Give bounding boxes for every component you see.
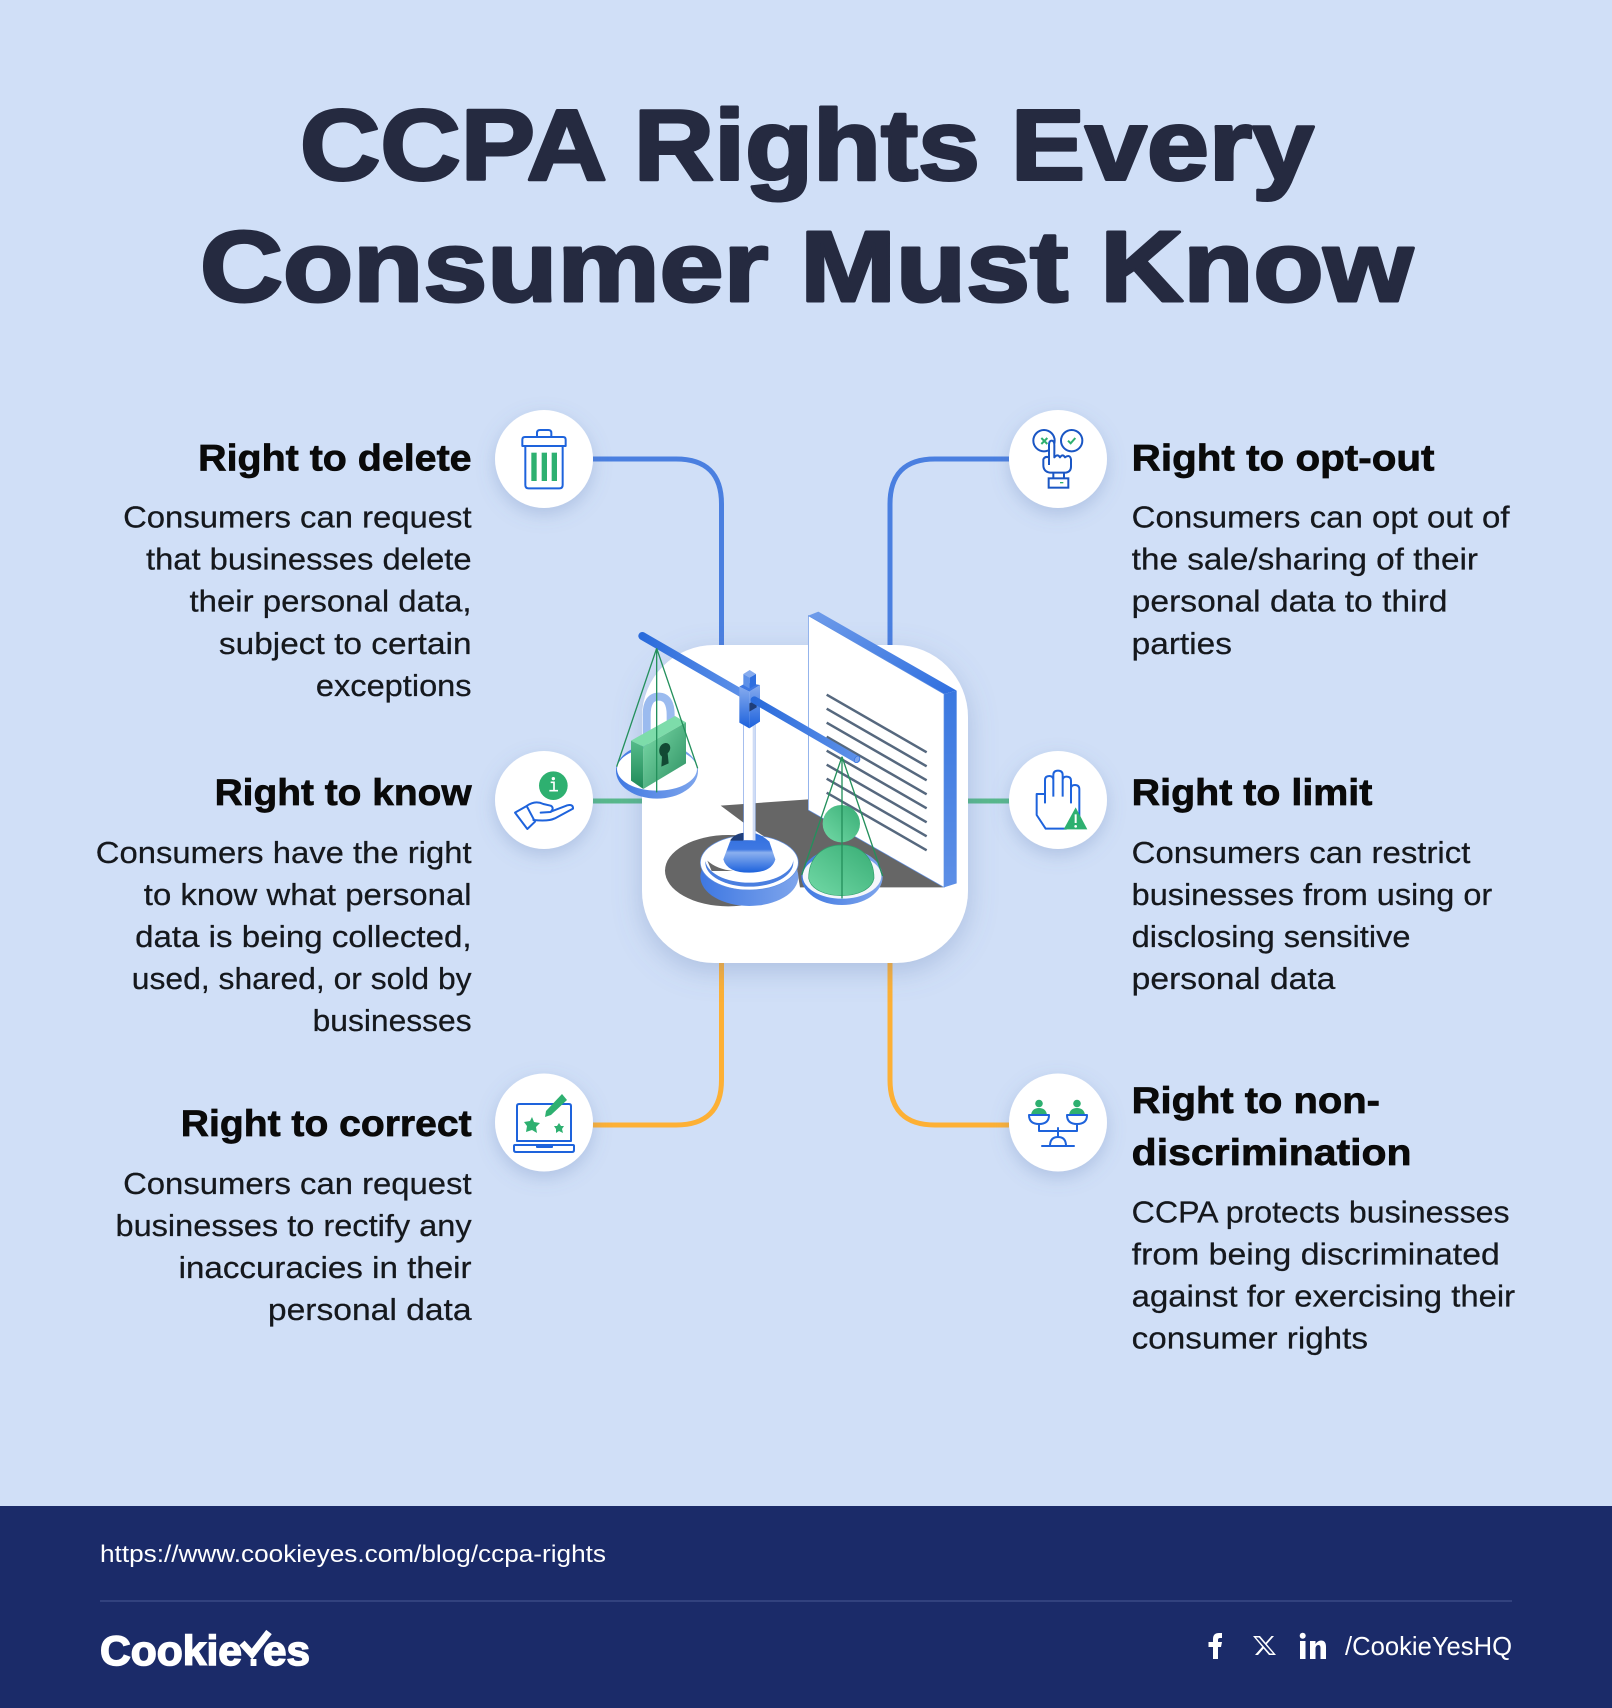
social handle: /CookieYesHQ <box>1345 1631 1512 1661</box>
panel: right to opt-out <box>1132 438 1510 661</box>
panel: right to delete <box>123 438 472 703</box>
icon: trash can <box>495 410 593 508</box>
heading: Right to correct <box>181 1103 472 1144</box>
description: Consumers can request <box>123 1166 472 1201</box>
description: Consumers have the right <box>96 835 472 870</box>
heading: Right to opt-out <box>1132 438 1434 478</box>
logo: CookieYes: Y <box>240 1631 267 1675</box>
description: Consumers can request <box>123 500 472 534</box>
description: personal data <box>1132 961 1336 996</box>
description: subject to certain <box>219 626 472 661</box>
description <box>123 500 472 703</box>
description <box>1132 1194 1515 1356</box>
logo: CookieYes: Cookie <box>100 1627 242 1674</box>
heading: discrimination <box>1132 1132 1412 1173</box>
icon: balanced scale with people <box>1009 1074 1107 1172</box>
heading: Right to non- <box>1132 1080 1380 1121</box>
hub <box>739 670 760 728</box>
icon: pointing hand with choices <box>1009 410 1107 508</box>
icon: raised hand with warning <box>1009 751 1107 849</box>
icon: facebook <box>1208 1633 1222 1659</box>
description: personal data <box>268 1292 472 1327</box>
footer band <box>0 1506 1612 1708</box>
beam left <box>642 636 742 693</box>
description: disclosing sensitive <box>1132 919 1410 954</box>
pole <box>744 725 755 840</box>
icon: linkedin <box>1300 1633 1326 1659</box>
floor shadow <box>665 799 943 906</box>
description: exceptions <box>316 668 472 703</box>
connector lines <box>593 459 1009 1125</box>
description: businesses <box>313 1003 472 1038</box>
icon: hand with info <box>495 751 593 849</box>
description: the sale/sharing of their <box>1132 542 1478 576</box>
description: parties <box>1132 626 1232 661</box>
description: from being discriminated <box>1132 1236 1500 1272</box>
central card <box>642 645 968 963</box>
description: businesses to rectify any <box>116 1208 472 1243</box>
heading <box>1132 1080 1412 1173</box>
icon: x <box>1253 1636 1276 1655</box>
title: Consumer Must Know <box>200 211 1413 323</box>
description: data is being collected, <box>135 919 472 954</box>
description: their personal data, <box>190 584 472 618</box>
document <box>808 612 957 887</box>
heading: Right to limit <box>1132 772 1372 813</box>
panel: right to correct <box>116 1103 472 1327</box>
source url: https://www.cookieyes.com/blog/ccpa-rights <box>100 1541 606 1568</box>
illustration: scale, lock, person and document <box>616 612 957 906</box>
logo: CookieYes: es <box>263 1627 310 1674</box>
description <box>96 835 472 1038</box>
description: Consumers can opt out of <box>1132 500 1510 534</box>
description: against for exercising their <box>1132 1278 1515 1314</box>
left pan with lock <box>616 648 698 799</box>
icon: laptop with pencil and stars <box>495 1074 593 1172</box>
description: businesses from using or <box>1132 877 1492 912</box>
panel: right to non-discrimination <box>1132 1080 1515 1356</box>
description <box>1132 500 1510 661</box>
heading: Right to know <box>215 772 472 813</box>
description: inaccuracies in their <box>179 1250 472 1285</box>
beam right <box>754 700 861 764</box>
description <box>116 1166 472 1327</box>
heading: Right to delete <box>198 438 472 478</box>
panel: right to limit <box>1132 772 1492 996</box>
description: personal data to third <box>1132 584 1448 618</box>
title <box>200 90 1413 323</box>
title: CCPA Rights Every <box>300 90 1314 202</box>
description: that businesses delete <box>146 542 472 576</box>
description <box>1132 835 1492 996</box>
description: CCPA protects businesses <box>1132 1194 1510 1230</box>
panel: right to know <box>96 772 472 1038</box>
logo: CookieYes <box>101 1630 309 1666</box>
description: Consumers can restrict <box>1132 835 1471 870</box>
description: used, shared, or sold by <box>132 961 472 996</box>
right pan with person <box>801 757 883 905</box>
base of scale <box>700 832 798 906</box>
description: consumer rights <box>1132 1320 1368 1356</box>
description: to know what personal <box>144 877 472 912</box>
